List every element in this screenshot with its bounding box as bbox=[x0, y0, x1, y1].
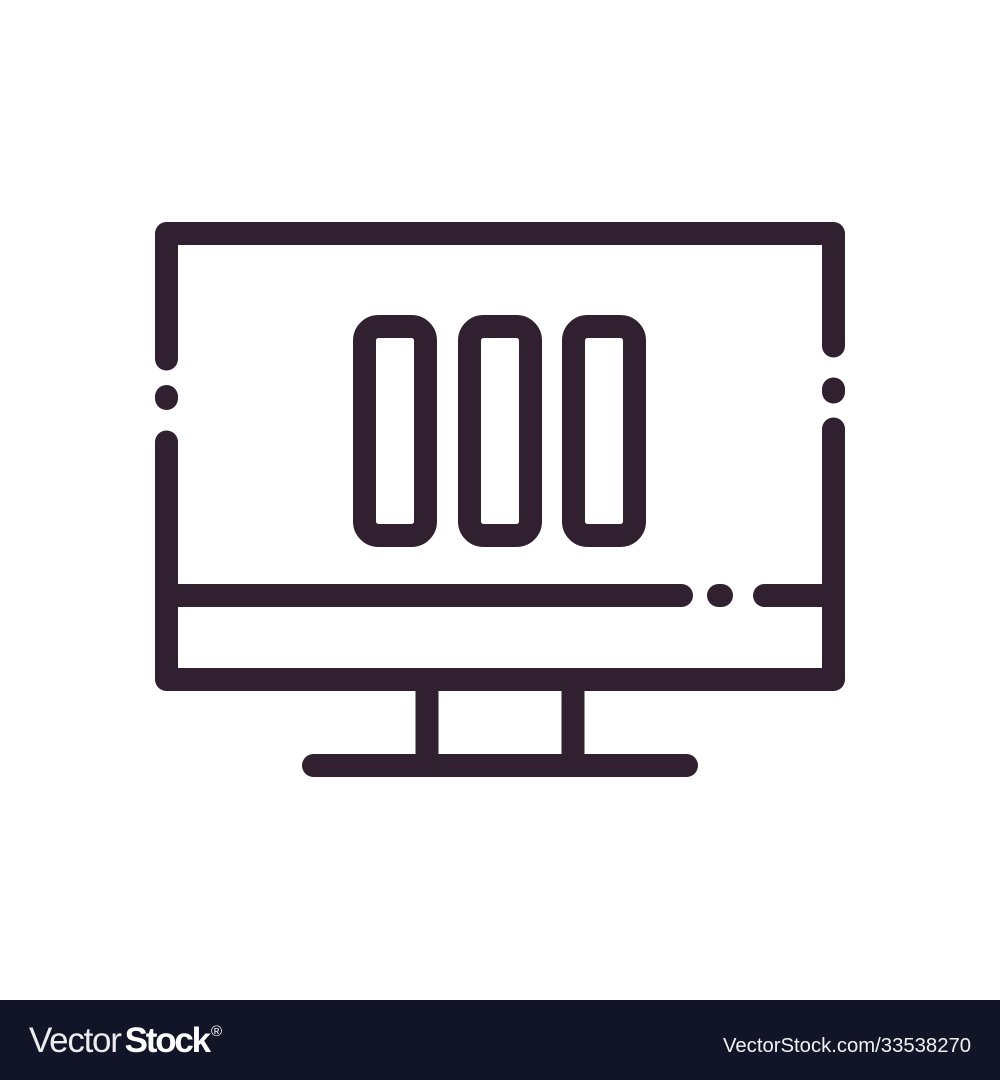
logo: VectorStock: VectorStock bbox=[29, 1021, 209, 1060]
three vertical bars bbox=[364, 326, 634, 536]
monitor stand bbox=[314, 680, 686, 766]
monitor screen outline bbox=[166, 234, 834, 680]
logo: VectorStock: ® bbox=[211, 1023, 222, 1040]
screen divider line bbox=[166, 584, 834, 607]
watermark footer bar bbox=[0, 1000, 1000, 1080]
image id url: VectorStock.com/33538270 bbox=[723, 1035, 971, 1057]
